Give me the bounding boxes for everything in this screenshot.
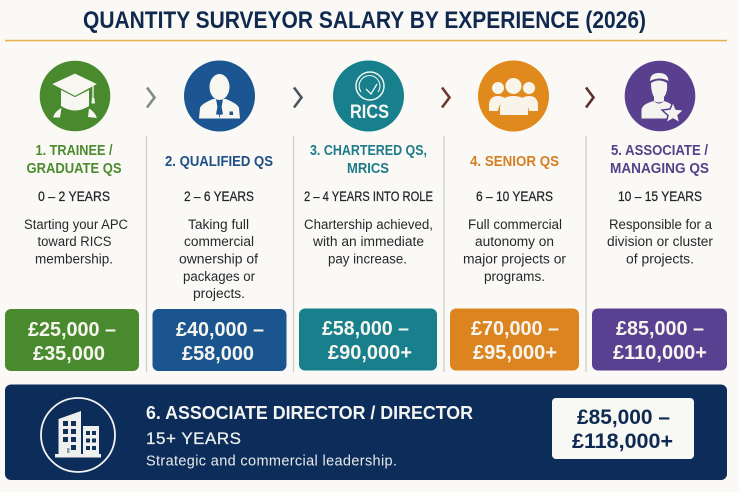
heading — [610, 143, 709, 177]
heading — [310, 143, 427, 177]
description — [607, 217, 714, 266]
banner years: 15+ YEARS — [146, 429, 241, 448]
description: ownership of — [179, 252, 258, 266]
description: Starting your APC — [24, 217, 128, 232]
experience years: 0 – 2 YEARS — [38, 188, 110, 204]
banner heading: 6. ASSOCIATE DIRECTOR / DIRECTOR — [146, 403, 473, 423]
salary box: £58,000 – — [322, 317, 409, 340]
heading: 4. SENIOR QS — [470, 154, 559, 170]
salary box — [152, 309, 286, 371]
experience years: 2 – 6 YEARS — [184, 188, 254, 204]
description: toward RICS — [38, 234, 112, 249]
experience years: 2 – 4 YEARS INTO ROLE — [304, 188, 433, 204]
banner description: Strategic and commercial leadership. — [146, 454, 397, 470]
icon: person with star — [625, 61, 695, 131]
salary box: £85,000 – — [577, 406, 670, 429]
salary box — [299, 308, 437, 370]
description: packages or — [183, 269, 255, 284]
salary box: £35,000 — [33, 342, 105, 365]
heading: 3. CHARTERED QS, — [310, 143, 427, 159]
heading: MANAGING QS — [610, 161, 709, 177]
salary box: £25,000 – — [28, 318, 116, 341]
salary box: £70,000 – — [471, 317, 559, 340]
description: pay increase. — [328, 252, 407, 266]
description: division or cluster — [607, 234, 714, 249]
description: projects. — [193, 286, 245, 301]
panel: associate / managing QS — [592, 61, 727, 370]
title: QUANTITY SURVEYOR SALARY BY EXPERIENCE (2026) — [83, 7, 646, 34]
salary box: £40,000 – — [176, 318, 264, 341]
icon: office buildings — [41, 398, 115, 472]
panel: trainee / graduate QS — [5, 61, 139, 371]
description — [179, 217, 258, 301]
experience years: 6 – 10 YEARS — [476, 188, 553, 204]
icon: RICS badge: RICS — [350, 102, 389, 123]
arrow: step 1 to 2 — [147, 88, 154, 108]
description — [304, 217, 433, 266]
arrow: step 3 to 4 — [442, 88, 450, 108]
salary box — [5, 309, 139, 371]
salary box: £110,000+ — [613, 341, 707, 364]
description: Chartership achieved, — [304, 217, 433, 232]
heading — [26, 143, 122, 177]
heading: 1. TRAINEE / — [36, 143, 112, 159]
salary box: £58,000 — [182, 342, 254, 365]
description: Full commercial — [468, 217, 562, 232]
panel: senior QS — [450, 60, 579, 370]
salary box: £90,000+ — [328, 341, 412, 364]
salary box — [450, 308, 579, 370]
salary box: £95,000+ — [473, 341, 557, 364]
icon: suited professional — [184, 60, 255, 132]
description: with an immediate — [312, 234, 424, 249]
icon: group of people — [478, 60, 549, 132]
panel: qualified QS — [152, 60, 286, 371]
icon: graduation cap — [40, 61, 110, 131]
heading: 2. QUALIFIED QS — [165, 154, 273, 170]
description: of projects. — [626, 252, 694, 266]
description: Responsible for a — [609, 217, 712, 232]
arrow: step 4 to 5 — [586, 88, 594, 108]
salary box: £85,000 – — [616, 317, 704, 340]
description: membership. — [35, 252, 113, 266]
arrow: step 2 to 3 — [294, 88, 302, 108]
heading: GRADUATE QS — [26, 161, 122, 177]
icon: RICS badge — [333, 60, 404, 132]
description — [463, 217, 567, 284]
description — [24, 217, 128, 266]
experience years: 10 – 15 YEARS — [618, 188, 702, 204]
salary box: £118,000+ — [572, 430, 673, 453]
description: commercial — [184, 234, 254, 249]
description: programs. — [484, 269, 545, 284]
description: Taking full — [188, 217, 249, 232]
panel: chartered QS, MRICS — [299, 60, 437, 370]
salary box — [552, 398, 694, 459]
salary box — [592, 308, 727, 370]
heading: MRICS — [347, 161, 389, 177]
panel: associate director / director banner — [5, 384, 727, 480]
description: autonomy on — [475, 234, 554, 249]
heading: 5. ASSOCIATE / — [611, 143, 708, 159]
description: major projects or — [463, 252, 567, 266]
